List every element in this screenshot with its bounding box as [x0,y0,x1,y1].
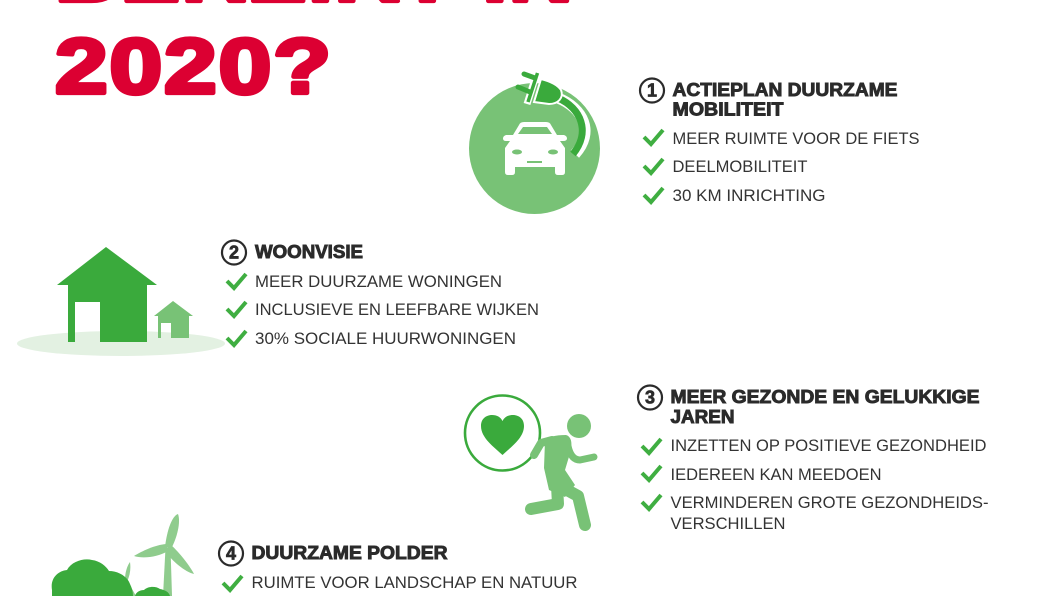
checklist [227,272,539,348]
checklist: VERSCHILLEN [670,514,786,533]
checklist [644,129,920,205]
number 3: 3 [645,388,655,408]
checklist: INZETTEN OP POSITIEVE GEZONDHEID [670,436,986,455]
number 1 [640,78,664,102]
number 2: 2 [229,242,239,262]
checklist: INCLUSIEVE EN LEEFBARE WIJKEN [255,300,539,319]
heading: DUURZAME POLDER [252,543,448,563]
panel: woonvisie [222,240,539,348]
panel: meer gezonde en gelukkige jaren [638,386,988,533]
number 3 [638,386,662,410]
checklist: MEER DUURZAME WONINGEN [255,272,502,291]
checklist: MEER RUIMTE VOOR DE FIETS [672,129,920,148]
number 1: 1 [647,80,657,100]
heading: MEER GEZONDE EN GELUKKIGE [670,387,980,407]
heading [670,387,980,427]
heading: WOONVISIE [255,242,363,262]
icon: wind turbines and trees [52,514,194,596]
checklist [642,436,988,533]
icon: runner with heart [465,396,594,525]
checklist: DEELMOBILITEIT [672,157,808,176]
icon: electric car with plug [469,71,600,214]
heading: ACTIEPLAN DUURZAME [672,80,898,100]
number 4 [219,542,243,566]
number 4: 4 [226,544,236,564]
panel: duurzame polder [219,542,578,592]
heading: MOBILITEIT [672,100,784,120]
checklist: 30 KM INRICHTING [672,186,826,205]
panel: actieplan duurzame mobiliteit [640,78,920,205]
icon: houses [17,247,225,356]
checklist: 30% SOCIALE HUURWONINGEN [255,329,516,348]
heading: JAREN [670,407,734,427]
checklist: IEDEREEN KAN MEEDOEN [670,465,882,484]
title: 2020? [55,23,333,110]
checklist: RUIMTE VOOR LANDSCHAP EN NATUUR [252,573,578,592]
number 2 [222,240,246,264]
checklist: VERMINDEREN GROTE GEZONDHEIDS- [670,493,988,512]
heading [672,80,898,120]
title [55,0,575,110]
